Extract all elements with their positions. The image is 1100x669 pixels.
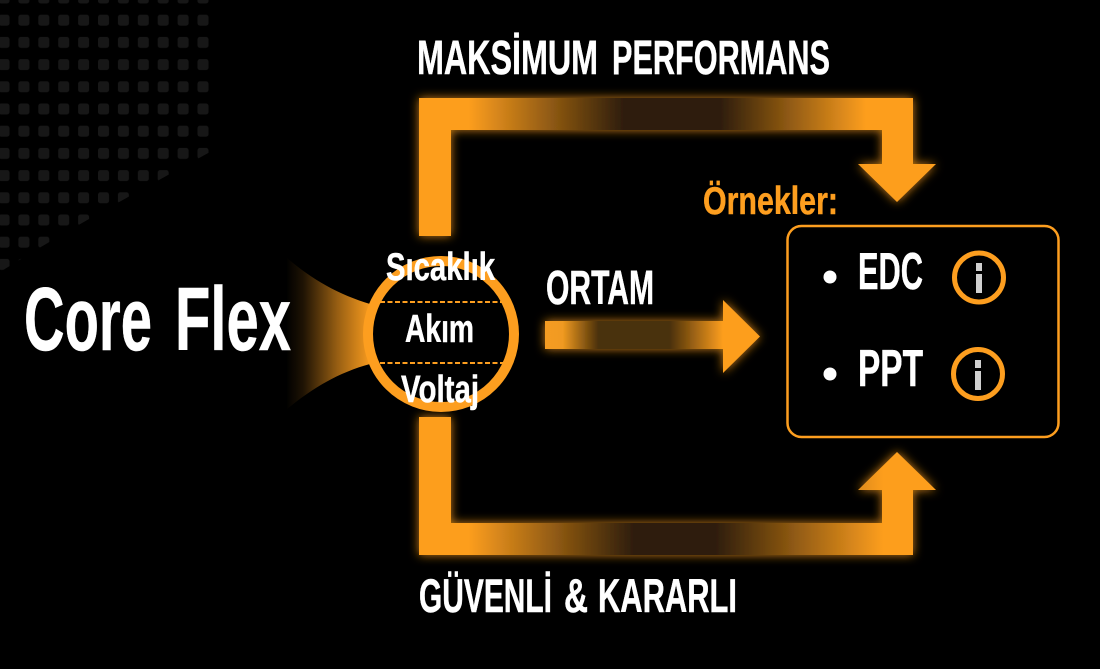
bullet: PPT [824, 368, 836, 380]
title: Core Flex: Core [24, 270, 152, 370]
heading: GÜVENLİ & KARARLI: KARARLI [598, 569, 737, 622]
bottom arrow: safe and stable [419, 417, 936, 555]
text: PPT: PPT [858, 340, 923, 398]
horn connector into circle [286, 257, 370, 410]
heading: GÜVENLİ & KARARLI [419, 569, 737, 622]
heading: GÜVENLİ & KARARLI: GÜVENLİ [419, 569, 552, 622]
heading: ORTAM: ORTAM [546, 262, 654, 315]
label: Voltaj: Voltaj [401, 369, 479, 411]
heading: Örnekler: Örnekler: [703, 180, 838, 223]
heading: MAKSİMUM PERFORMANS: PERFORMANS [612, 32, 830, 85]
label: Akım: Akım [405, 308, 474, 351]
limits circle [368, 246, 514, 411]
top arrow: maximum performance [419, 98, 936, 236]
label: Sıcaklık: Sıcaklık [386, 246, 495, 289]
text: EDC: EDC [858, 243, 923, 301]
heading: MAKSİMUM PERFORMANS: MAKSİMUM [417, 32, 598, 85]
middle arrow: ambient [545, 300, 760, 373]
background dot grid [0, 0, 210, 272]
examples panel [788, 226, 1058, 437]
title: Core Flex: Flex [175, 270, 291, 370]
bullet: EDC [824, 270, 836, 284]
heading: GÜVENLİ & KARARLI: & [564, 569, 588, 622]
heading: MAKSİMUM PERFORMANS [417, 32, 830, 85]
icon: info EDC [954, 253, 1004, 302]
icon: info PPT [954, 350, 1002, 398]
